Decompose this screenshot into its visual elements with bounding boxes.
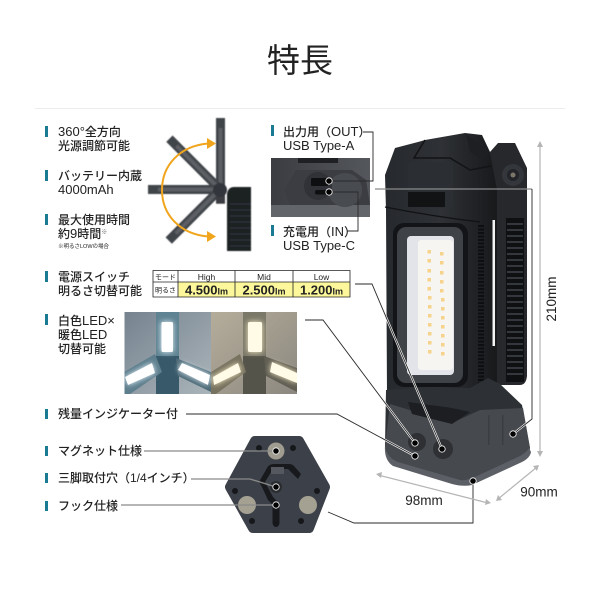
feature: 360 degree rotation: 360°全方向 bbox=[58, 124, 121, 139]
dimension: width: 98mm bbox=[405, 493, 443, 508]
feature: battery: バッテリー内蔵 bbox=[58, 168, 142, 183]
device main body bbox=[385, 133, 531, 486]
feature: LED colour: 暖色LED bbox=[58, 327, 107, 342]
title: 特長 bbox=[267, 42, 333, 79]
brightness table bbox=[153, 270, 350, 298]
label: USB out: USB Type-A bbox=[283, 138, 355, 153]
USB port photo bbox=[271, 158, 370, 217]
feature: hook: フック仕様 bbox=[58, 498, 118, 513]
feature: run time: ※明るさLOWの場合 bbox=[58, 242, 110, 250]
rear arm bbox=[490, 143, 527, 385]
rotating arm diagram bbox=[148, 118, 251, 251]
feature: run time: 最大使用時間 bbox=[58, 212, 130, 227]
photo: white and warm light bbox=[124, 312, 297, 394]
brightness table: 明るさ bbox=[155, 286, 176, 294]
dimension: depth: 90mm bbox=[520, 484, 558, 500]
dimension: height bbox=[537, 141, 559, 457]
white gap bbox=[492, 220, 495, 346]
device underside bbox=[230, 441, 325, 528]
brightness table: モード bbox=[155, 274, 176, 282]
feature: tripod hole: 三脚取付穴（1/4インチ） bbox=[58, 471, 195, 485]
base bbox=[385, 378, 531, 486]
feature: power switch bbox=[45, 270, 142, 298]
side ribs bbox=[478, 225, 484, 385]
body shell bbox=[385, 133, 497, 395]
feature: power switch: 明るさ切替可能 bbox=[58, 283, 142, 298]
feature: battery bbox=[45, 168, 142, 197]
brightness table: 1.200lm bbox=[300, 282, 343, 298]
feature: LED colour bbox=[45, 313, 115, 356]
feature: 360 degree rotation bbox=[45, 124, 130, 153]
feature: run time: ※ bbox=[101, 230, 107, 236]
brightness table: Low bbox=[314, 272, 330, 282]
dimension: height: 210mm bbox=[544, 276, 559, 322]
feature: power switch: 電源スイッチ bbox=[58, 270, 130, 284]
feature: remaining charge indicator: 残量インジケーター付 bbox=[58, 406, 178, 421]
brightness table: High bbox=[198, 272, 216, 282]
brightness table: 4.500lm bbox=[185, 282, 228, 298]
label: USB out: 出力用（OUT） bbox=[283, 124, 370, 139]
feature: LED colour: 切替可能 bbox=[58, 341, 106, 356]
feature: run time: 約9時間 bbox=[58, 226, 101, 241]
label: USB out bbox=[271, 124, 370, 153]
feature: magnet: マグネット仕様 bbox=[58, 443, 142, 458]
feature: battery: 4000mAh bbox=[58, 182, 114, 197]
brightness table: Mid bbox=[257, 272, 271, 282]
arrow: rotation arc bbox=[162, 138, 216, 242]
LED lens bbox=[407, 236, 454, 375]
dimension: depth bbox=[496, 465, 558, 501]
screw holes bbox=[232, 445, 320, 527]
dimension: width bbox=[376, 472, 491, 508]
leader lines bbox=[121, 132, 532, 523]
feature: 360 degree rotation: 光源調節可能 bbox=[58, 138, 130, 153]
brightness table: 2.500lm bbox=[242, 282, 286, 298]
label: USB in: USB Type-C bbox=[283, 238, 355, 253]
label: USB in: 充電用（IN） bbox=[283, 224, 356, 239]
light panel frame bbox=[393, 223, 468, 387]
feature: LED colour: 白色LED× bbox=[58, 313, 115, 328]
feature: run time bbox=[45, 212, 130, 250]
label: USB in bbox=[271, 224, 356, 253]
magnets bbox=[238, 442, 317, 514]
